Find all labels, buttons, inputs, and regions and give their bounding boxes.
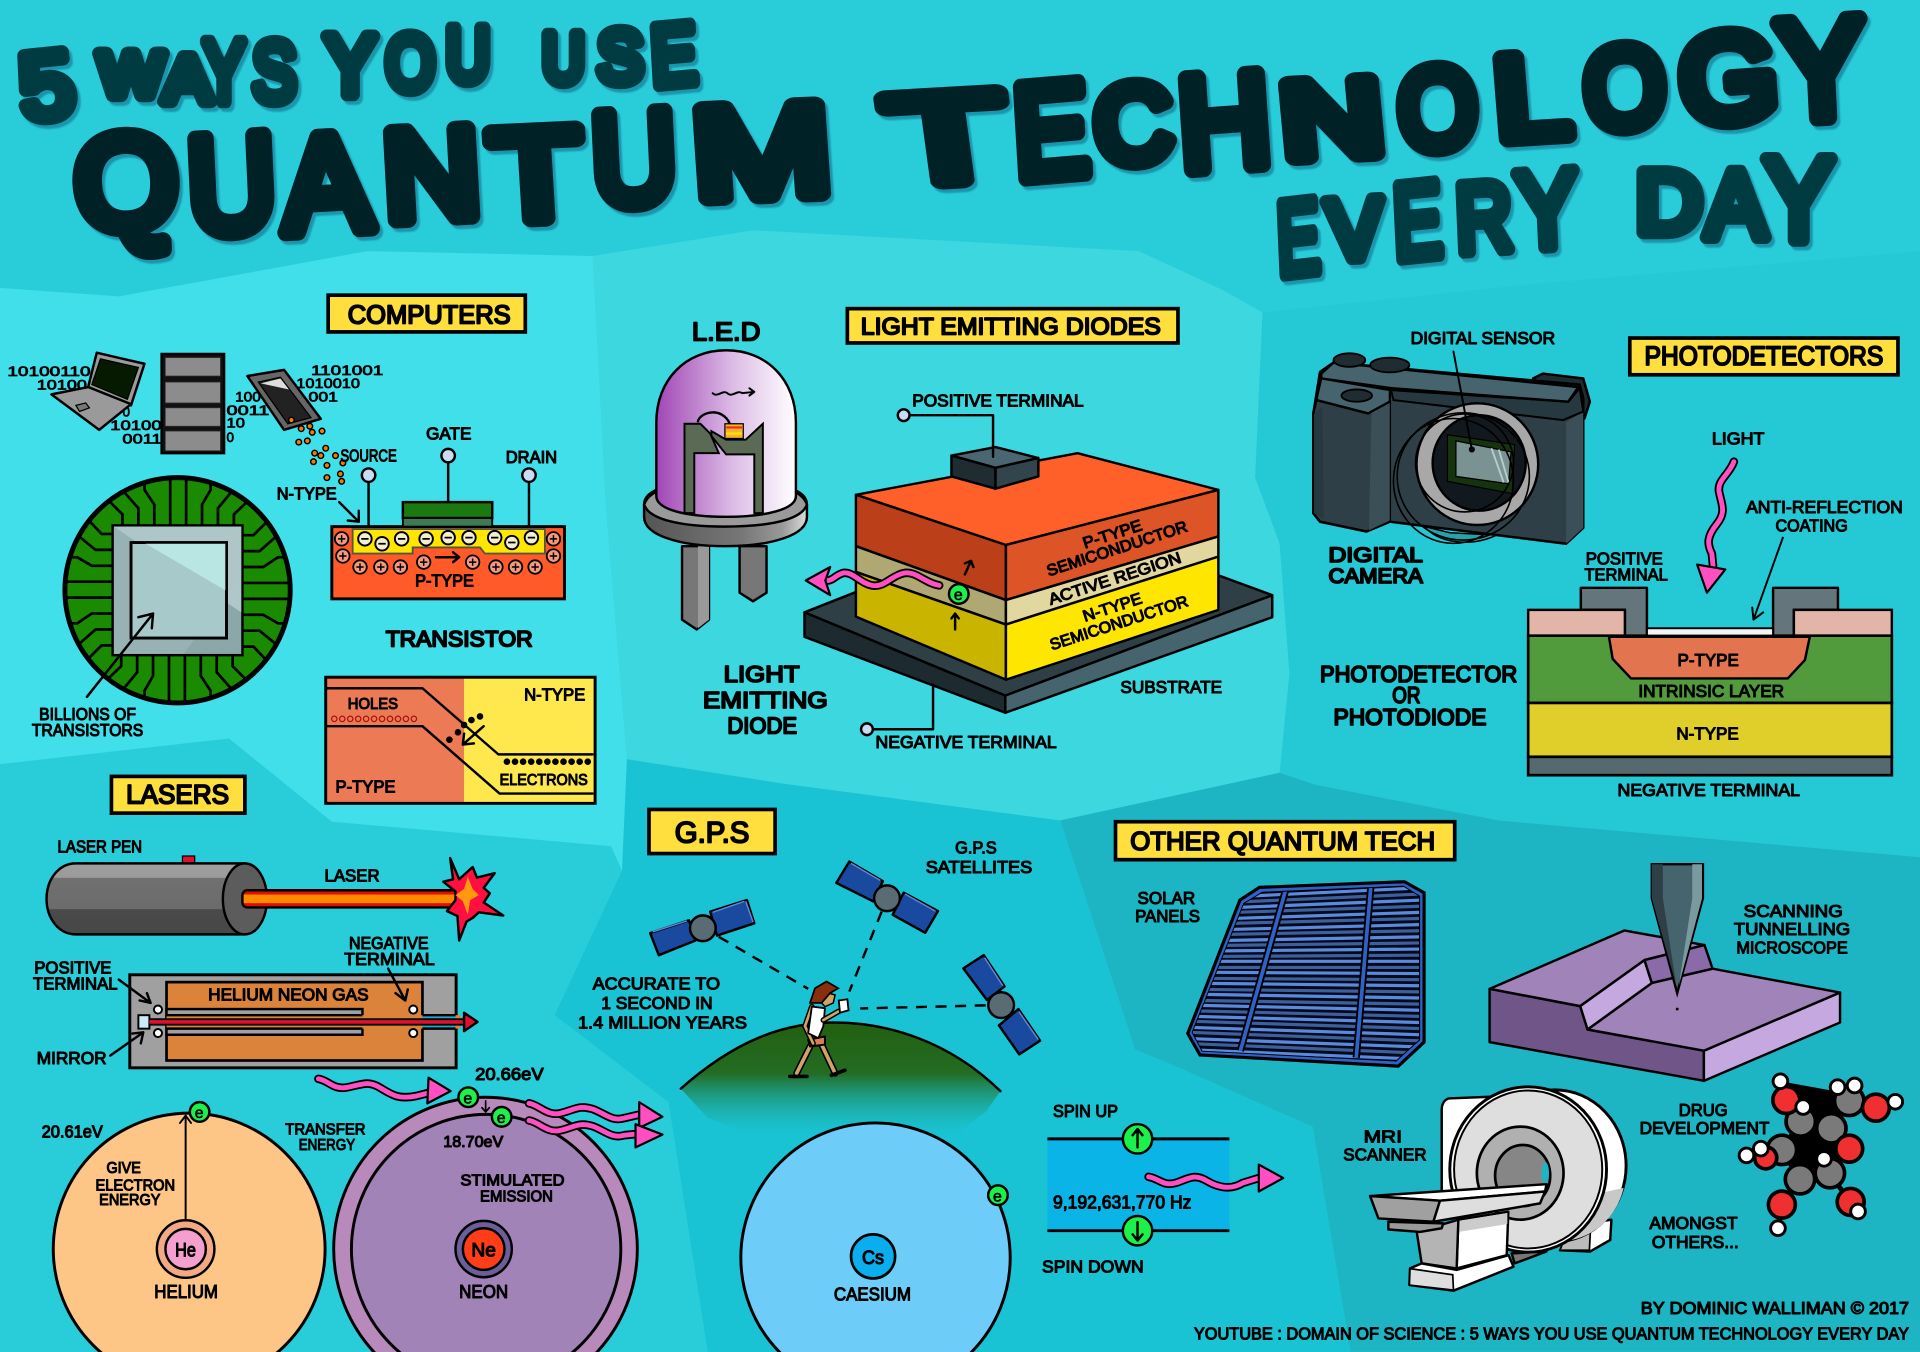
binary data text: 100 xyxy=(235,390,261,405)
heading: light emitting diodes: LIGHT EMITTING DIODES xyxy=(861,313,1161,340)
labels: photodetector diagram: NEGATIVE TERMINAL xyxy=(1618,780,1800,800)
arrows and labels: laser tube: LASER xyxy=(324,866,380,886)
label: billions of transistors: TRANSISTORS xyxy=(32,720,143,740)
title line: quantum technology: U xyxy=(588,83,680,234)
labels: terminals and substrate: SUBSTRATE xyxy=(1120,677,1222,697)
label: photodetector or photodiode: PHOTODIODE xyxy=(1333,704,1487,730)
title line: 5 ways you use: 5 xyxy=(14,31,79,140)
panel: GPS xyxy=(578,809,1283,1352)
title line: quantum technology xyxy=(71,0,1869,264)
atom: helium: HELIUM xyxy=(154,1281,218,1302)
label: light emitting diode xyxy=(703,661,828,739)
icon: satellite 2 xyxy=(836,862,938,933)
arrows and labels: laser tube: NEGATIVE xyxy=(349,933,429,953)
panel: computers xyxy=(7,295,595,803)
atom: caesium: e xyxy=(993,1188,1002,1205)
binary data text xyxy=(7,363,383,446)
arrow: light wave xyxy=(1697,462,1734,593)
electron xyxy=(949,584,969,604)
icon: digital camera xyxy=(1313,353,1590,544)
heading: G.P.S xyxy=(649,809,775,854)
binary data text: 10 xyxy=(227,415,245,430)
binary data text: 10100110 xyxy=(7,364,91,379)
label: scanning tunnelling microscope: MICROSCOPE xyxy=(1736,937,1848,957)
title line: 5 ways you use: S xyxy=(598,15,643,98)
atom: neon: 18.70eV xyxy=(443,1134,504,1151)
label: photodetector or photodiode: OR xyxy=(1392,682,1420,708)
title line: every day: Y xyxy=(1512,148,1581,273)
arrows and labels: laser tube: TERMINAL xyxy=(33,973,118,993)
title line: quantum technology: N xyxy=(380,101,484,247)
title line: 5 ways you use: S xyxy=(252,24,296,118)
diagram: band gap: P-TYPE xyxy=(336,776,396,796)
labels: gps: SATELLITES xyxy=(926,857,1032,877)
arrows and labels: laser tube xyxy=(33,836,435,1068)
title line: quantum technology: C xyxy=(1090,61,1176,188)
label: digital camera: DIGITAL xyxy=(1329,544,1423,567)
atom: helium: He xyxy=(175,1239,196,1261)
label: transfer energy: TRANSFER xyxy=(285,1122,366,1139)
icon: scanning tunnelling microscope xyxy=(1490,864,1840,1081)
diagram: helium neon laser tube: HELIUM NEON GAS xyxy=(208,984,369,1004)
label: scanning tunnelling microscope: SCANNING xyxy=(1744,901,1843,921)
title line: every day: E xyxy=(1388,160,1445,283)
binary data text: 0011 xyxy=(122,431,162,446)
heading: lasers: LASERS xyxy=(126,779,229,809)
title line: 5 ways you use: Y xyxy=(203,24,245,121)
arrow: emitted microwave xyxy=(1149,1165,1283,1192)
substrate xyxy=(804,514,1272,713)
atom: helium: e xyxy=(195,1105,204,1122)
atom: helium xyxy=(53,1102,325,1352)
heading: photodetectors: PHOTODETECTORS xyxy=(1644,341,1883,371)
label: scanning tunnelling microscope xyxy=(1734,901,1850,957)
diagram: LED layer stack: SEMICONDUCTOR xyxy=(1048,593,1190,654)
label: amongst others: AMONGST xyxy=(1649,1213,1738,1233)
icon: smartphone xyxy=(247,370,321,430)
atom: neon xyxy=(334,1064,637,1352)
title line: every day xyxy=(1272,134,1834,299)
icon: LED bulb xyxy=(644,350,807,629)
diagram: LED layer stack xyxy=(804,409,1272,735)
diagram: band gap: N-TYPE xyxy=(524,684,585,704)
labels: gps: 1 SECOND IN xyxy=(601,993,713,1013)
labels: photodetector diagram: POSITIVE xyxy=(1586,549,1663,569)
labels: terminals and substrate: POSITIVE TERMINAL xyxy=(912,391,1084,411)
label: solar panels: PANELS xyxy=(1135,906,1200,926)
label: solar panels xyxy=(1135,888,1200,926)
diagram: transistor: N-TYPE xyxy=(277,484,337,504)
atom: neon: NEON xyxy=(459,1281,508,1302)
labels: gps: 1.4 MILLION YEARS xyxy=(578,1013,747,1033)
diagram: band gap: HOLES xyxy=(348,696,398,713)
icon: solar panel xyxy=(1183,882,1424,1066)
arrow: energy transfer wave xyxy=(318,1078,451,1103)
binary data text: 1010010 xyxy=(296,376,360,391)
binary data text: 0011 xyxy=(227,403,269,418)
callout: digital sensor: DIGITAL SENSOR xyxy=(1411,328,1555,348)
credits xyxy=(1194,1298,1910,1343)
label: photodetector or photodiode xyxy=(1320,661,1517,730)
arrows and labels: laser tube: POSITIVE xyxy=(34,958,111,978)
icon: laser burst xyxy=(443,858,503,940)
icon: laptop xyxy=(51,353,144,430)
icon: satellite 1 xyxy=(650,900,754,955)
label: solar panels: SOLAR xyxy=(1138,888,1195,908)
title line: quantum technology: H xyxy=(1173,45,1275,199)
arrows and labels: laser tube: MIRROR xyxy=(37,1048,107,1068)
diagram: caesium spin transition: SPIN UP xyxy=(1053,1101,1118,1121)
label: 20.61eV: 20.61eV xyxy=(42,1122,103,1142)
title line: 5 ways you use: O xyxy=(386,18,435,106)
label: transfer energy xyxy=(285,1122,366,1154)
panel: lasers xyxy=(33,776,662,1352)
credits: BY DOMINIC WALLIMAN © 2017 xyxy=(1641,1298,1909,1318)
heading: other quantum tech: OTHER QUANTUM TECH xyxy=(1130,828,1435,856)
labels: photodetector diagram: COATING xyxy=(1776,516,1848,536)
title line: quantum technology: E xyxy=(1008,55,1093,208)
binary data text: 0 xyxy=(122,404,130,419)
binary data text: 0 xyxy=(227,430,234,445)
diagram: transistor: P-TYPE xyxy=(415,571,474,591)
title line: quantum technology: Q xyxy=(71,106,181,259)
label: mri scanner xyxy=(1343,1127,1427,1165)
title line: 5 ways you use: U xyxy=(542,20,584,97)
atom: neon: 20.66eV xyxy=(475,1064,544,1084)
diagram: transistor: GATE xyxy=(426,424,471,444)
label: scanning tunnelling microscope: TUNNELLING xyxy=(1734,919,1850,939)
icon: microchip xyxy=(62,475,293,706)
heading: other quantum tech xyxy=(1116,822,1455,860)
diagram: transistor: SOURCE xyxy=(340,446,397,466)
title line: 5 ways you use: W xyxy=(99,41,163,109)
atom: helium: GIVE xyxy=(107,1160,141,1177)
icon: server rack xyxy=(162,354,224,453)
title line: every day: Y xyxy=(1763,134,1834,265)
diagram: helium neon laser tube xyxy=(130,975,478,1068)
title line: quantum technology: A xyxy=(279,105,374,262)
panel: other quantum tech xyxy=(1116,822,1903,1291)
labels: photodetector diagram: ANTI-REFLECTION xyxy=(1746,497,1903,517)
label: mri scanner: MRI xyxy=(1364,1127,1402,1147)
binary data text: 001 xyxy=(309,390,338,405)
signal lines xyxy=(719,912,986,1008)
heading: G.P.S: G.P.S xyxy=(675,817,749,850)
diagram: photodiode: INTRINSIC LAYER xyxy=(1638,681,1784,701)
panel: light emitting diodes xyxy=(644,309,1272,752)
hill xyxy=(681,1023,1000,1135)
icon: drug molecule xyxy=(1739,1074,1903,1236)
label: L.E.D: L.E.D xyxy=(692,318,760,346)
heading: lasers xyxy=(111,776,245,813)
label: drug development: DRUG xyxy=(1679,1100,1728,1120)
title xyxy=(14,0,1869,299)
icon: MRI scanner xyxy=(1370,1087,1626,1291)
photon arrow xyxy=(806,567,939,595)
labels: terminals and substrate: NEGATIVE TERMINAL xyxy=(876,732,1057,752)
label: amongst others xyxy=(1649,1213,1739,1252)
label: digital camera: CAMERA xyxy=(1329,565,1423,588)
title line: every day: D xyxy=(1636,153,1702,252)
binary data text: 10100 xyxy=(110,418,162,433)
arrow: anti-reflection coating xyxy=(1752,538,1783,620)
electrons from devices xyxy=(289,417,346,484)
label: drug development xyxy=(1640,1100,1770,1138)
diagram: transistor xyxy=(277,424,564,599)
labels: photodetector diagram xyxy=(1584,429,1903,800)
labels: gps xyxy=(578,838,1032,1033)
callout arrow: billions of transistors xyxy=(87,614,153,697)
labels: photodetector diagram: TERMINAL xyxy=(1584,564,1668,584)
diagram: LED layer stack: ACTIVE REGION xyxy=(1047,550,1183,609)
label: digital camera xyxy=(1329,544,1423,588)
icon: laser pen xyxy=(47,856,267,934)
atom: neon: Ne xyxy=(471,1239,496,1261)
title line: quantum technology: U xyxy=(183,107,279,264)
title line: 5 ways you use: E xyxy=(647,7,699,104)
laser beam xyxy=(242,890,458,907)
atom: neon: e xyxy=(497,1110,506,1127)
labels: terminals and substrate xyxy=(876,391,1222,752)
title line: every day: V xyxy=(1325,181,1385,278)
atom: caesium: CAESIUM xyxy=(834,1283,911,1304)
label: transfer energy: ENERGY xyxy=(299,1137,355,1154)
title line: quantum technology: O xyxy=(1394,43,1481,176)
title line: quantum technology: N xyxy=(1278,55,1387,181)
callout: digital sensor xyxy=(1411,328,1555,453)
diagram: photodiode: N-TYPE xyxy=(1676,724,1739,744)
diagram: LED layer stack: P-TYPE xyxy=(1081,517,1144,552)
title line: quantum technology: M xyxy=(689,76,835,226)
label: mri scanner: SCANNER xyxy=(1343,1145,1427,1165)
diagram: caesium spin transition xyxy=(1042,1101,1229,1276)
heading: computers: COMPUTERS xyxy=(348,301,511,329)
labels: gps: ACCURATE TO xyxy=(593,973,720,993)
title line: quantum technology: T xyxy=(884,63,1013,211)
atom: neon: EMISSION xyxy=(480,1188,553,1205)
atom: helium: ELECTRON xyxy=(96,1177,175,1194)
title line: 5 ways you use: Y xyxy=(324,18,376,112)
title line: 5 ways you use xyxy=(14,7,699,140)
title line: quantum technology: T xyxy=(487,101,585,247)
arrows and labels: laser tube: TERMINAL xyxy=(344,949,435,969)
binary data text: 10100 xyxy=(37,377,87,392)
label: billions of transistors: BILLIONS OF xyxy=(39,704,136,724)
diagram: band gap: ELECTRONS xyxy=(500,772,588,789)
binary data text: 1101001 xyxy=(311,363,383,378)
label: amongst others: OTHERS... xyxy=(1652,1232,1739,1252)
atom: caesium: Cs xyxy=(862,1247,884,1269)
title line: quantum technology: L xyxy=(1490,29,1574,165)
positive contact block xyxy=(951,447,1038,489)
arrows and labels: laser tube: LASER PEN xyxy=(58,836,142,856)
diagram: LED layer stack: SEMICONDUCTOR xyxy=(1045,519,1190,580)
panel: photodetectors xyxy=(1313,328,1903,800)
title line: quantum technology: O xyxy=(1580,22,1669,155)
atom: helium: ENERGY xyxy=(99,1192,161,1209)
label: billions of transistors xyxy=(32,704,143,740)
labels: gps: G.P.S xyxy=(955,838,997,858)
diagram: caesium spin transition: 9,192,631,770 Hz xyxy=(1053,1192,1191,1213)
title line: 5 ways you use: U xyxy=(446,13,490,98)
arrows: stimulated emission light xyxy=(529,1102,662,1147)
labels: photodetector diagram: LIGHT xyxy=(1712,429,1765,449)
title line: every day: E xyxy=(1272,180,1323,299)
title line: quantum technology: G xyxy=(1675,6,1782,151)
label: light emitting diode: LIGHT xyxy=(724,661,800,687)
title line: every day: A xyxy=(1706,153,1766,259)
label: transistor: TRANSISTOR xyxy=(386,627,533,652)
label: light emitting diode: DIODE xyxy=(727,713,797,739)
atom: caesium xyxy=(741,1123,1010,1352)
icon: person with phone xyxy=(790,982,849,1076)
heading: computers xyxy=(328,295,525,332)
atom: neon: STIMULATED xyxy=(460,1172,564,1189)
electron: e xyxy=(954,587,963,604)
diagram: transistor: DRAIN xyxy=(506,447,557,467)
semiconductor layers xyxy=(856,453,1218,680)
label: photodetector or photodiode: PHOTODETECTOR xyxy=(1320,661,1517,687)
diagram: photodiode: P-TYPE xyxy=(1678,650,1739,670)
icon: satellite 3 xyxy=(963,955,1040,1054)
title line: every day: R xyxy=(1453,162,1514,273)
diagram: caesium spin transition: SPIN DOWN xyxy=(1042,1256,1144,1276)
label: light emitting diode: EMITTING xyxy=(703,687,828,713)
atom: neon: e xyxy=(463,1090,472,1107)
diagram: band gap xyxy=(326,677,595,803)
label: drug development: DEVELOPMENT xyxy=(1640,1118,1770,1138)
title line: 5 ways you use: A xyxy=(164,43,211,116)
diagram: photodiode xyxy=(1528,588,1892,775)
diagram: LED layer stack: N-TYPE xyxy=(1081,590,1144,626)
